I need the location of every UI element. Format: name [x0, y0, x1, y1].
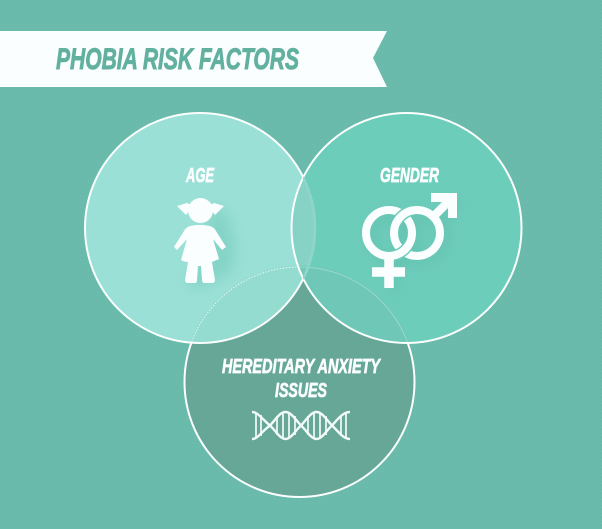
label: age: AGE — [185, 165, 214, 187]
panel: age circle — [85, 113, 315, 343]
label: hereditary anxiety issues: HEREDITARY ANXIETY — [222, 356, 381, 378]
title banner — [0, 31, 387, 87]
icon: dna — [252, 412, 350, 439]
icon: gender symbols — [366, 193, 457, 288]
panel: hereditary circle — [186, 281, 414, 496]
overlap: age and gender lens — [292, 180, 314, 266]
label: gender: GENDER — [380, 165, 439, 187]
icon: girl — [174, 198, 226, 283]
panel: gender circle — [292, 113, 522, 343]
label: hereditary anxiety issues: ISSUES — [275, 380, 327, 402]
icon shadow: gender symbols — [371, 200, 461, 293]
circle outlines — [85, 113, 522, 497]
overlap: triple lens — [300, 268, 306, 276]
title: PHOBIA RISK FACTORS — [56, 43, 299, 76]
overlap: gender and hereditary — [304, 269, 406, 342]
icon shadow: girl — [184, 205, 236, 288]
label: hereditary anxiety issues — [222, 356, 381, 402]
overlap: age and hereditary — [194, 268, 302, 342]
